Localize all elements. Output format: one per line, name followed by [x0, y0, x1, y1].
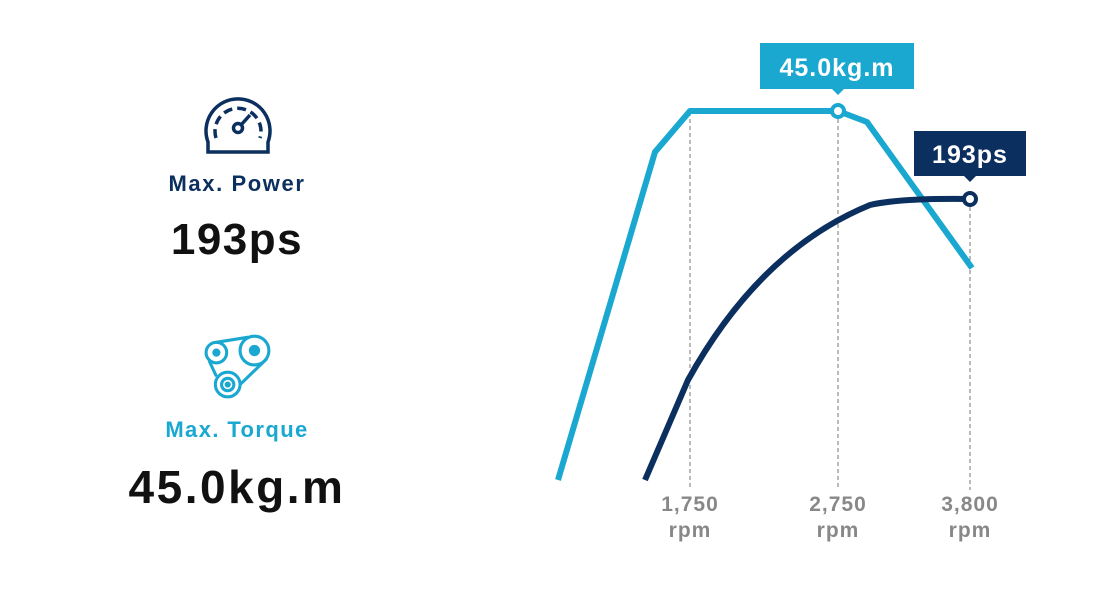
- chart: torque and power curves: rpm: [669, 519, 711, 542]
- chart: torque and power curves: rpm: [817, 519, 859, 542]
- chart: torque and power curves: 193ps: [932, 141, 1008, 169]
- chart: torque and power curves: 1,750: [661, 493, 719, 516]
- value: 193ps: 193ps: [171, 215, 303, 264]
- chart: torque and power curves: 45.0kg.m: [779, 54, 895, 82]
- icon: belt pulleys: [204, 334, 270, 398]
- value: 45.0kg.m: 45.0kg.m: [129, 461, 345, 513]
- label: Max. Torque: Max. Torque: [165, 417, 309, 442]
- chart: torque and power curves: rpm: [949, 519, 991, 542]
- chart: torque and power curves: 2,750: [809, 493, 867, 516]
- label: Max. Power: Max. Power: [168, 171, 306, 196]
- chart: torque and power curves: 3,800: [941, 493, 999, 516]
- icon: speedometer: [204, 97, 272, 154]
